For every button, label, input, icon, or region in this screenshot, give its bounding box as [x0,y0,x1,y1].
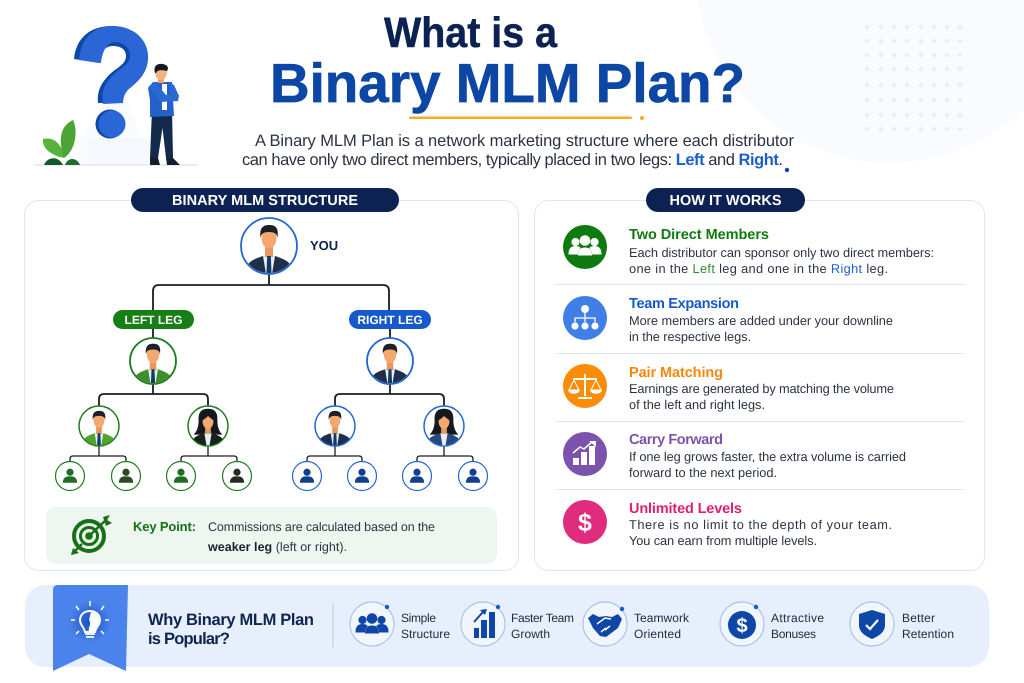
right leg nodes [292,338,488,490]
item: two direct members: Two Direct Members [629,227,769,243]
icon: thinking man [148,64,180,165]
item: team expansion: in the respective legs. [629,329,751,344]
title: Binary MLM Plan? [270,52,745,114]
callout: key point: weaker leg (left or right). [207,540,347,554]
intro text: A Binary MLM Plan is a network marketing structure where each distributor [255,132,794,150]
title [270,10,745,114]
item: unlimited levels: Unlimited Levels [629,501,742,517]
intro text: can have only two direct members, typically placed in two legs: Left and Right. [242,151,783,169]
title underline [409,116,644,120]
benefit: faster team growth: Growth [511,627,550,641]
benefit: teamwork oriented: Teamwork [634,611,690,625]
panel: why popular [25,585,989,671]
item: unlimited levels: You can earn from multiple levels. [629,533,817,548]
item: two direct members: one in the Left leg and one in the Right leg. [629,261,888,276]
heading: binary MLM structure: BINARY MLM STRUCTURE [172,193,358,209]
label: right leg: RIGHT LEG [357,313,423,327]
benefit: better retention: Better [902,611,935,625]
panel: binary MLM structure [24,188,518,570]
left leg nodes [56,338,252,490]
title: What is a [384,10,557,57]
benefit: teamwork oriented: Oriented [634,627,681,641]
icon: question mark [74,26,148,138]
benefit: better retention: Retention [902,627,954,641]
label: left leg: LEFT LEG [124,313,182,327]
item: carry forward: Carry Forward [629,432,723,448]
item: pair matching: Earnings are generated by matching the volume [629,381,894,396]
panel: how it works [534,188,984,570]
item: team expansion [563,296,893,344]
ribbon with light bulb icon [53,585,128,671]
item: two direct members [563,225,934,276]
item: carry forward: If one leg grows faster, the extra volume is carried [629,449,906,464]
item: unlimited levels: There is no limit to the depth of your team. [629,517,892,532]
benefit: simple structure: Simple [401,611,436,625]
icon: plant [43,120,80,165]
label: left leg [113,310,194,329]
benefit: attractive bonuses [720,602,824,646]
heading: binary MLM structure [131,188,399,212]
item: two direct members: Each distributor can sponsor only two direct members: [629,245,934,260]
intro text [242,132,794,172]
item: unlimited levels: $ [578,509,592,537]
benefit: teamwork oriented [583,602,690,646]
item: pair matching [563,364,894,412]
heading: why popular [148,611,314,648]
item: carry forward [563,432,906,480]
tree connectors [70,274,473,462]
node: you [241,218,338,274]
item: carry forward: forward to the next period. [629,465,777,480]
item: pair matching: Pair Matching [629,365,723,381]
label: right leg [349,310,431,329]
item: pair matching: of the left and right legs. [629,397,765,412]
benefit: faster team growth [461,602,574,646]
benefit: faster team growth: Faster Team [511,611,574,625]
item: team expansion: Team Expansion [629,296,739,312]
benefit: attractive bonuses: Attractive [771,611,824,625]
benefit: attractive bonuses: Bonuses [771,627,816,641]
benefit: simple structure: Structure [401,627,450,641]
heading: why popular: is Popular? [148,630,230,648]
node: you: YOU [310,238,338,253]
callout: key point [46,507,497,564]
icon: target [71,515,112,555]
item: unlimited levels [563,500,892,548]
benefit: simple structure [350,602,450,646]
benefit: attractive bonuses: $ [736,615,748,637]
heading: how it works [646,188,805,212]
heading: how it works: HOW IT WORKS [670,193,782,209]
callout: key point: Commissions are calculated based on the [208,520,435,534]
illustration: question mark, thinking man and plant [34,26,198,166]
item: team expansion: More members are added under your downline [629,313,893,328]
heading: why popular: Why Binary MLM Plan [148,611,314,629]
callout: key point: Key Point: [133,519,196,534]
benefit: better retention [850,602,954,646]
